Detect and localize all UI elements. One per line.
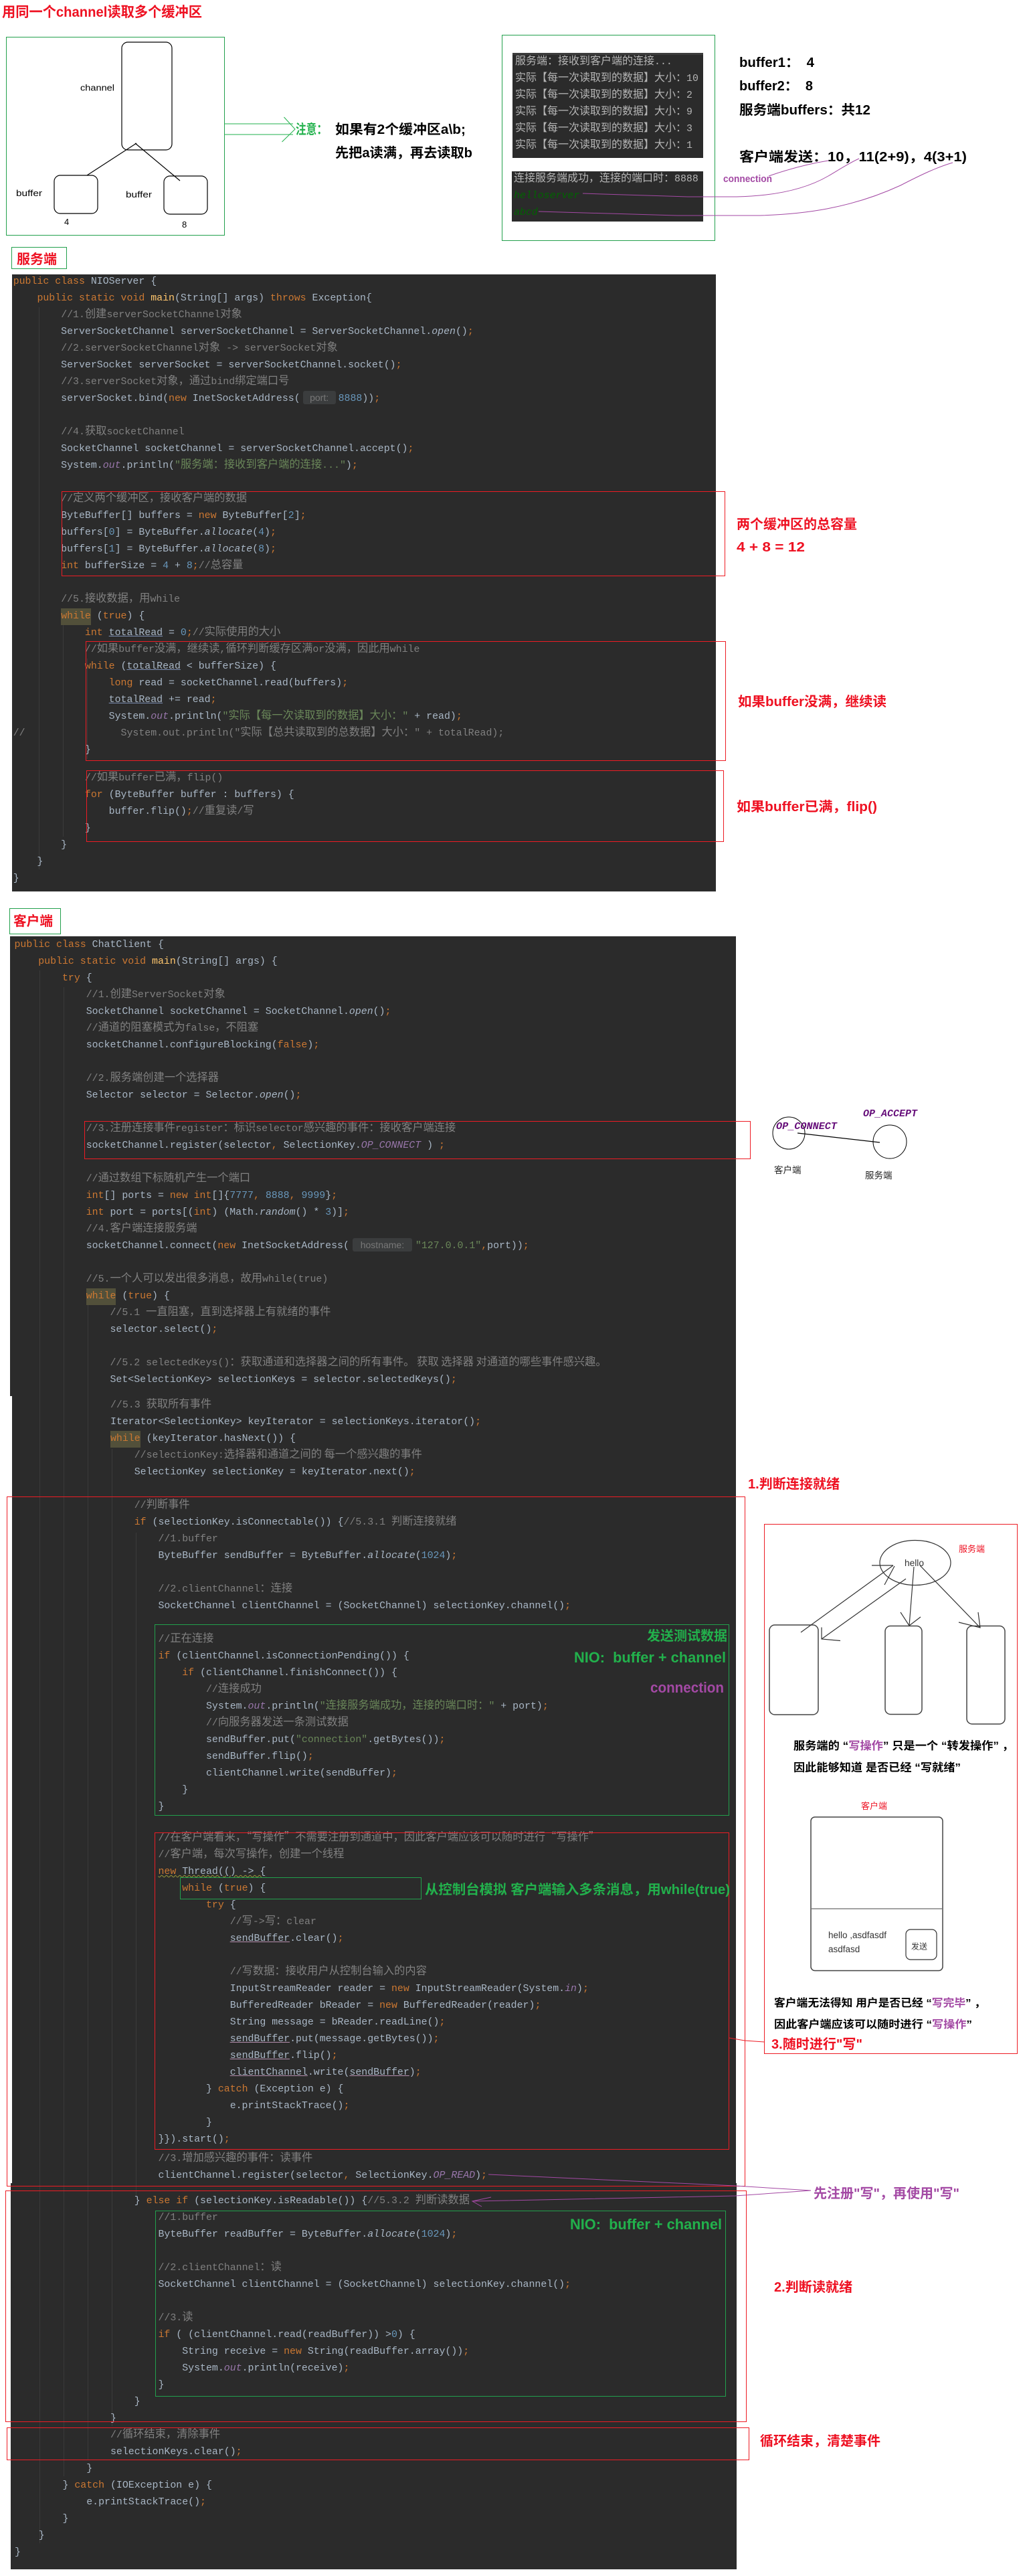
text: console input note: 从控制台模拟 客户端输入多条消息，用while(true)	[425, 1881, 730, 1897]
label: 4: 4	[64, 217, 69, 227]
label: client heading	[9, 909, 60, 934]
callout: total capacity text: 4 + 8 = 12	[737, 540, 805, 555]
icon: buffer box 8	[164, 176, 207, 214]
code: client read part: } else if (selectionKey.isReadable()) {//5.3.2 判断读数据 //1.buffer ByteBuffer readBuffer = ByteBuffer.allocate(1024); //2.clientChannel：读 SocketChannel clientChannel = (SocketChannel) selectionKey.channel(); //3.读 if ( (clientChannel.read(readBuffer)) >0) { String receive = new String(readBuffer.array()); System.out.println(receive); } } } //循环结束，清除事件 selectionKeys.clear(); } } catch (IOException e) { e.printStackTrace(); } } }	[15, 2190, 571, 2558]
panel: write explanation	[764, 1525, 1017, 2053]
icon: buffer box 4	[54, 175, 98, 213]
callout: read ready box	[5, 2191, 747, 2421]
text: server console lines: 服务端：接收到客户端的连接... 实际【每一次读取到的数据】大小：10 实际【每一次读取到的数据】大小：2 实际【每一次读取到的数据】大小：9 实际【每一次读取到的数据】大小：3 实际【每一次读取到的数据】大小：1	[515, 51, 698, 151]
callout: clear events box	[7, 2428, 749, 2460]
title: 用同一个channel读取多个缓冲区	[2, 5, 202, 20]
label: note: 注意：	[296, 121, 327, 137]
panel: client code background middle	[12, 1396, 736, 2183]
label: buffer left: buffer	[16, 188, 43, 198]
text: send test data notes: 发送测试数据	[647, 1628, 727, 1644]
text: nio read note: NIO: buffer + channel	[570, 2216, 722, 2233]
callout: note on two buffers	[296, 121, 472, 161]
label: OP_ACCEPT: OP_ACCEPT	[863, 1108, 918, 1120]
text: client write note: 因此客户端应该可以随时进行 “ 写操作”	[774, 2018, 972, 2031]
text: clear events note: 循环结束，清楚事件	[760, 2433, 880, 2449]
text: server write note: 服务端的 “写操作” 只是一个 “转发操作” ，	[793, 1739, 1014, 1752]
text: line two: 先把a读满，再去读取b	[335, 145, 472, 161]
text: buffer sizes	[739, 56, 967, 165]
text: buffer2: buffer2： 8	[739, 79, 813, 94]
text: send test data notes: connection	[650, 1679, 724, 1696]
text: client sends: 客户端发送：10，11(2+9)，4(3+1)	[739, 149, 967, 165]
panel: console client output	[512, 171, 703, 222]
code: server part 2: //如果buffer已满，flip() for (ByteBuffer buffer : buffers) { buffer.flip();//重复读/写 } } } }	[13, 767, 294, 883]
text: register then write: 先注册"写"，再使用"写"	[814, 2186, 959, 2201]
callout: register connect box	[84, 1122, 751, 1159]
code: client part 1: public class ChatClient { public static void main(String[] args) { try { //1.创建ServerSocket对象 SocketChannel socketChannel = SocketChannel.open(); //通道的阻塞模式为false，不阻塞 socketChannel.configureBlocking(false); //2.服务端创建一个选择器 Selector selector = Selector.open(); //3.注册连接事件register：标识selector感兴趣的事件：接收客户端连接 socketChannel.register(selector, SelectionKey.OP_CONNECT ) ; //通过数组下标随机产生一个端口 int[] ports = new int[]{7777, 8888, 9999}; int port = ports[(int) (Math.random() * 3)]; //4.客户端连接服务端 socketChannel.connect(new InetSocketAddress( "127.0.0.1",port)); //5.一个人可以发出很多消息，故用while(true) (true) { //5.1 一直阻塞，直到选择器上有就绪的事件 selector.select(); //5.2 selectedKeys()：获取通道和选择器之间的所有事件。 获取 选择器 对通道的哪些事件感兴趣。 Set<SelectionKey> selectionKeys = selector.selectedKeys();	[15, 940, 607, 1385]
panel: client code background bottom	[11, 2183, 737, 2569]
callout: write thread box	[155, 1832, 729, 2150]
code: client part 1: while	[86, 1291, 116, 1302]
label: buffer right: buffer	[126, 189, 153, 199]
label: client: 客户端	[861, 1801, 887, 1811]
callout: buffer full text: 如果buffer已满，flip()	[737, 799, 877, 814]
code: server part 1: while	[61, 611, 91, 622]
text: client write note	[774, 1996, 985, 2031]
code: client write thread: //在客户端看来，“写操作”不需要注册到通道中，因此客户端应该可以随时进行“写操作” //客户端，每次写操作，创建一个线程 new Thread(() -> { while (true) { try { //写->写：clear sendBuffer.clear(); //写数据：接收用户从控制台输入的内容 InputStreamReader reader = new InputStreamReader(System.in); BufferedReader bReader = new BufferedReader(reader); String message = bReader.readLine(); sendBuffer.put(message.getBytes()); sendBuffer.flip(); clientChannel.write(sendBuffer); } catch (Exception e) { e.printStackTrace(); } }}).start();	[15, 1828, 599, 2145]
panel: server code background	[12, 274, 716, 891]
panel: console frame	[502, 35, 715, 241]
label: server: 服务端	[865, 1171, 893, 1181]
text: server buffers total: 服务端buffers：共12	[739, 102, 870, 118]
text: line one: 如果有2个缓冲区a\b;	[335, 122, 466, 137]
label: step 1 connect ready: 1.判断连接就绪	[748, 1476, 840, 1492]
code: client register read: //3.增加感兴趣的事件：读事件 clientChannel.register(selector, SelectionKey.OP_READ);	[158, 2148, 487, 2181]
label: server: 服务端	[959, 1544, 985, 1554]
icon: client boxes	[769, 1625, 1005, 1724]
callout: send test data box	[155, 1625, 729, 1815]
text: send test data notes: NIO: buffer + channel	[574, 1649, 726, 1666]
code: client part 2: while	[110, 1434, 140, 1444]
code: server part 1: port:	[310, 392, 328, 403]
callout: total capacity text	[737, 516, 857, 555]
icon: server ellipse	[880, 1541, 951, 1585]
callout: buffer not full box	[86, 641, 725, 760]
icon: client window: asdfasd	[828, 1944, 860, 1954]
label: client heading: 客户端	[13, 913, 53, 929]
arrow: purple console links	[539, 159, 953, 216]
arrow: forwarding arrows	[801, 1565, 980, 1641]
icon: channel box	[122, 42, 172, 150]
text: send test data notes	[574, 1628, 727, 1696]
icon: send button	[906, 1929, 937, 1960]
text: typed message: hello ,asdfasdf	[828, 1930, 886, 1940]
callout: total capacity text: 两个缓冲区的总容量	[737, 516, 857, 532]
icon: client window	[811, 1817, 943, 1970]
arrow: green note arrow	[224, 117, 295, 142]
text: client write note: 客户端无法得知 用户是否已经 “ 写完毕” ，	[774, 1996, 985, 2009]
callout: total capacity box	[62, 491, 725, 576]
code: client part 2: //5.3 获取所有事件 Iterator<SelectionKey> keyIterator = selectionKeys.iterator(); (keyIterator.hasNext()) { //selectionKey:选择器和通道之间的 每一个感兴趣的事件 SelectionKey selectionKey = keyIterator.next(); //判断事件 if (selectionKey.isConnectable()) {//5.3.1 判断连接就绪 //1.buffer ByteBuffer sendBuffer = ByteBuffer.allocate(1024); //2.clientChannel：连接 SocketChannel clientChannel = (SocketChannel) selectionKey.channel(); //正在连接 if (clientChannel.isConnectionPending()) { if (clientChannel.finishConnect()) { //连接成功 System.out.println("连接服务端成功，连接的端口时：" + port); //向服务器发送一条测试数据 sendBuffer.put("connection".getBytes()); sendBuffer.flip(); clientChannel.write(sendBuffer); } }	[15, 1395, 571, 1812]
label: hello: hello	[905, 1558, 924, 1568]
label: OP_CONNECT: OP_CONNECT	[776, 1121, 838, 1132]
label: server heading	[12, 248, 67, 269]
text: client console lines: 连接服务端成功，连接的端口时：8888 helloserver abcd	[514, 169, 698, 218]
callout: buffer not full text: 如果buffer没满，继续读	[738, 693, 886, 709]
text: server write note: 因此能够知道 是否已经 “写就绪”	[793, 1760, 961, 1774]
callout: read buffer box	[155, 2211, 725, 2396]
text: buffer1: buffer1： 4	[739, 56, 815, 70]
label: 8: 8	[182, 220, 187, 230]
label: client: 客户端	[774, 1165, 802, 1175]
panel: channel and buffers diagram	[7, 37, 225, 236]
callout: connect ready box	[7, 1496, 745, 2186]
label: connection: connection	[723, 173, 772, 185]
arrow: register then write	[472, 2174, 811, 2207]
label: step 3 write anytime: 3.随时进行"写"	[771, 2037, 862, 2052]
arrow: channel to buffers	[87, 143, 180, 181]
label: channel: channel	[80, 83, 114, 92]
label: server heading: 服务端	[17, 252, 57, 267]
callout: buffer full box	[87, 771, 724, 842]
label: step 2 read ready: 2.判断读就绪	[774, 2280, 852, 2295]
code: server part 1: public class NIOServer { public static void main(String[] args) throws Exception{ //1.创建serverSocketChannel对象 ServerSocketChannel serverSocketChannel = ServerSocketChannel.open(); //2.serverSocketChannel对象 -> serverSocket对象 ServerSocket serverSocket = serverSocketChannel.socket(); //3.serverSocket对象，通过bind绑定端口号 serverSocket.bind(new InetSocketAddress( 8888)); //4.获取socketChannel SocketChannel socketChannel = serverSocketChannel.accept(); System.out.println("服务端：接收到客户端的连接..."); //定义两个缓冲区，接收客户端的数据 ByteBuffer[] buffers = new ByteBuffer[2]; buffers[0] = ByteBuffer.allocate(4); buffers[1] = ByteBuffer.allocate(8); int bufferSize = 4 + 8;//总容量 //5.接收数据，用while (true) { int totalRead = 0;//实际使用的大小 //如果buffer没满，继续读,循环判断缓存区满or没满，因此用while while (totalRead < bufferSize) { long read = socketChannel.read(buffers); totalRead += read; System.out.println("实际【每一次读取到的数据】大小：" + read); // System.out.println("实际【总共读取到的总数据】大小：" + totalRead); }	[13, 276, 504, 756]
panel: console server output	[512, 53, 703, 158]
code: client part 1: hostname:	[361, 1239, 404, 1250]
label: send: 发送	[911, 1941, 927, 1952]
chart: client server connect diagram	[773, 1108, 918, 1181]
callout: while true box	[181, 1878, 421, 1899]
arrow: step 3 connector	[729, 2038, 764, 2042]
text: server write note	[793, 1739, 1014, 1774]
panel: client code background top	[10, 936, 736, 1396]
